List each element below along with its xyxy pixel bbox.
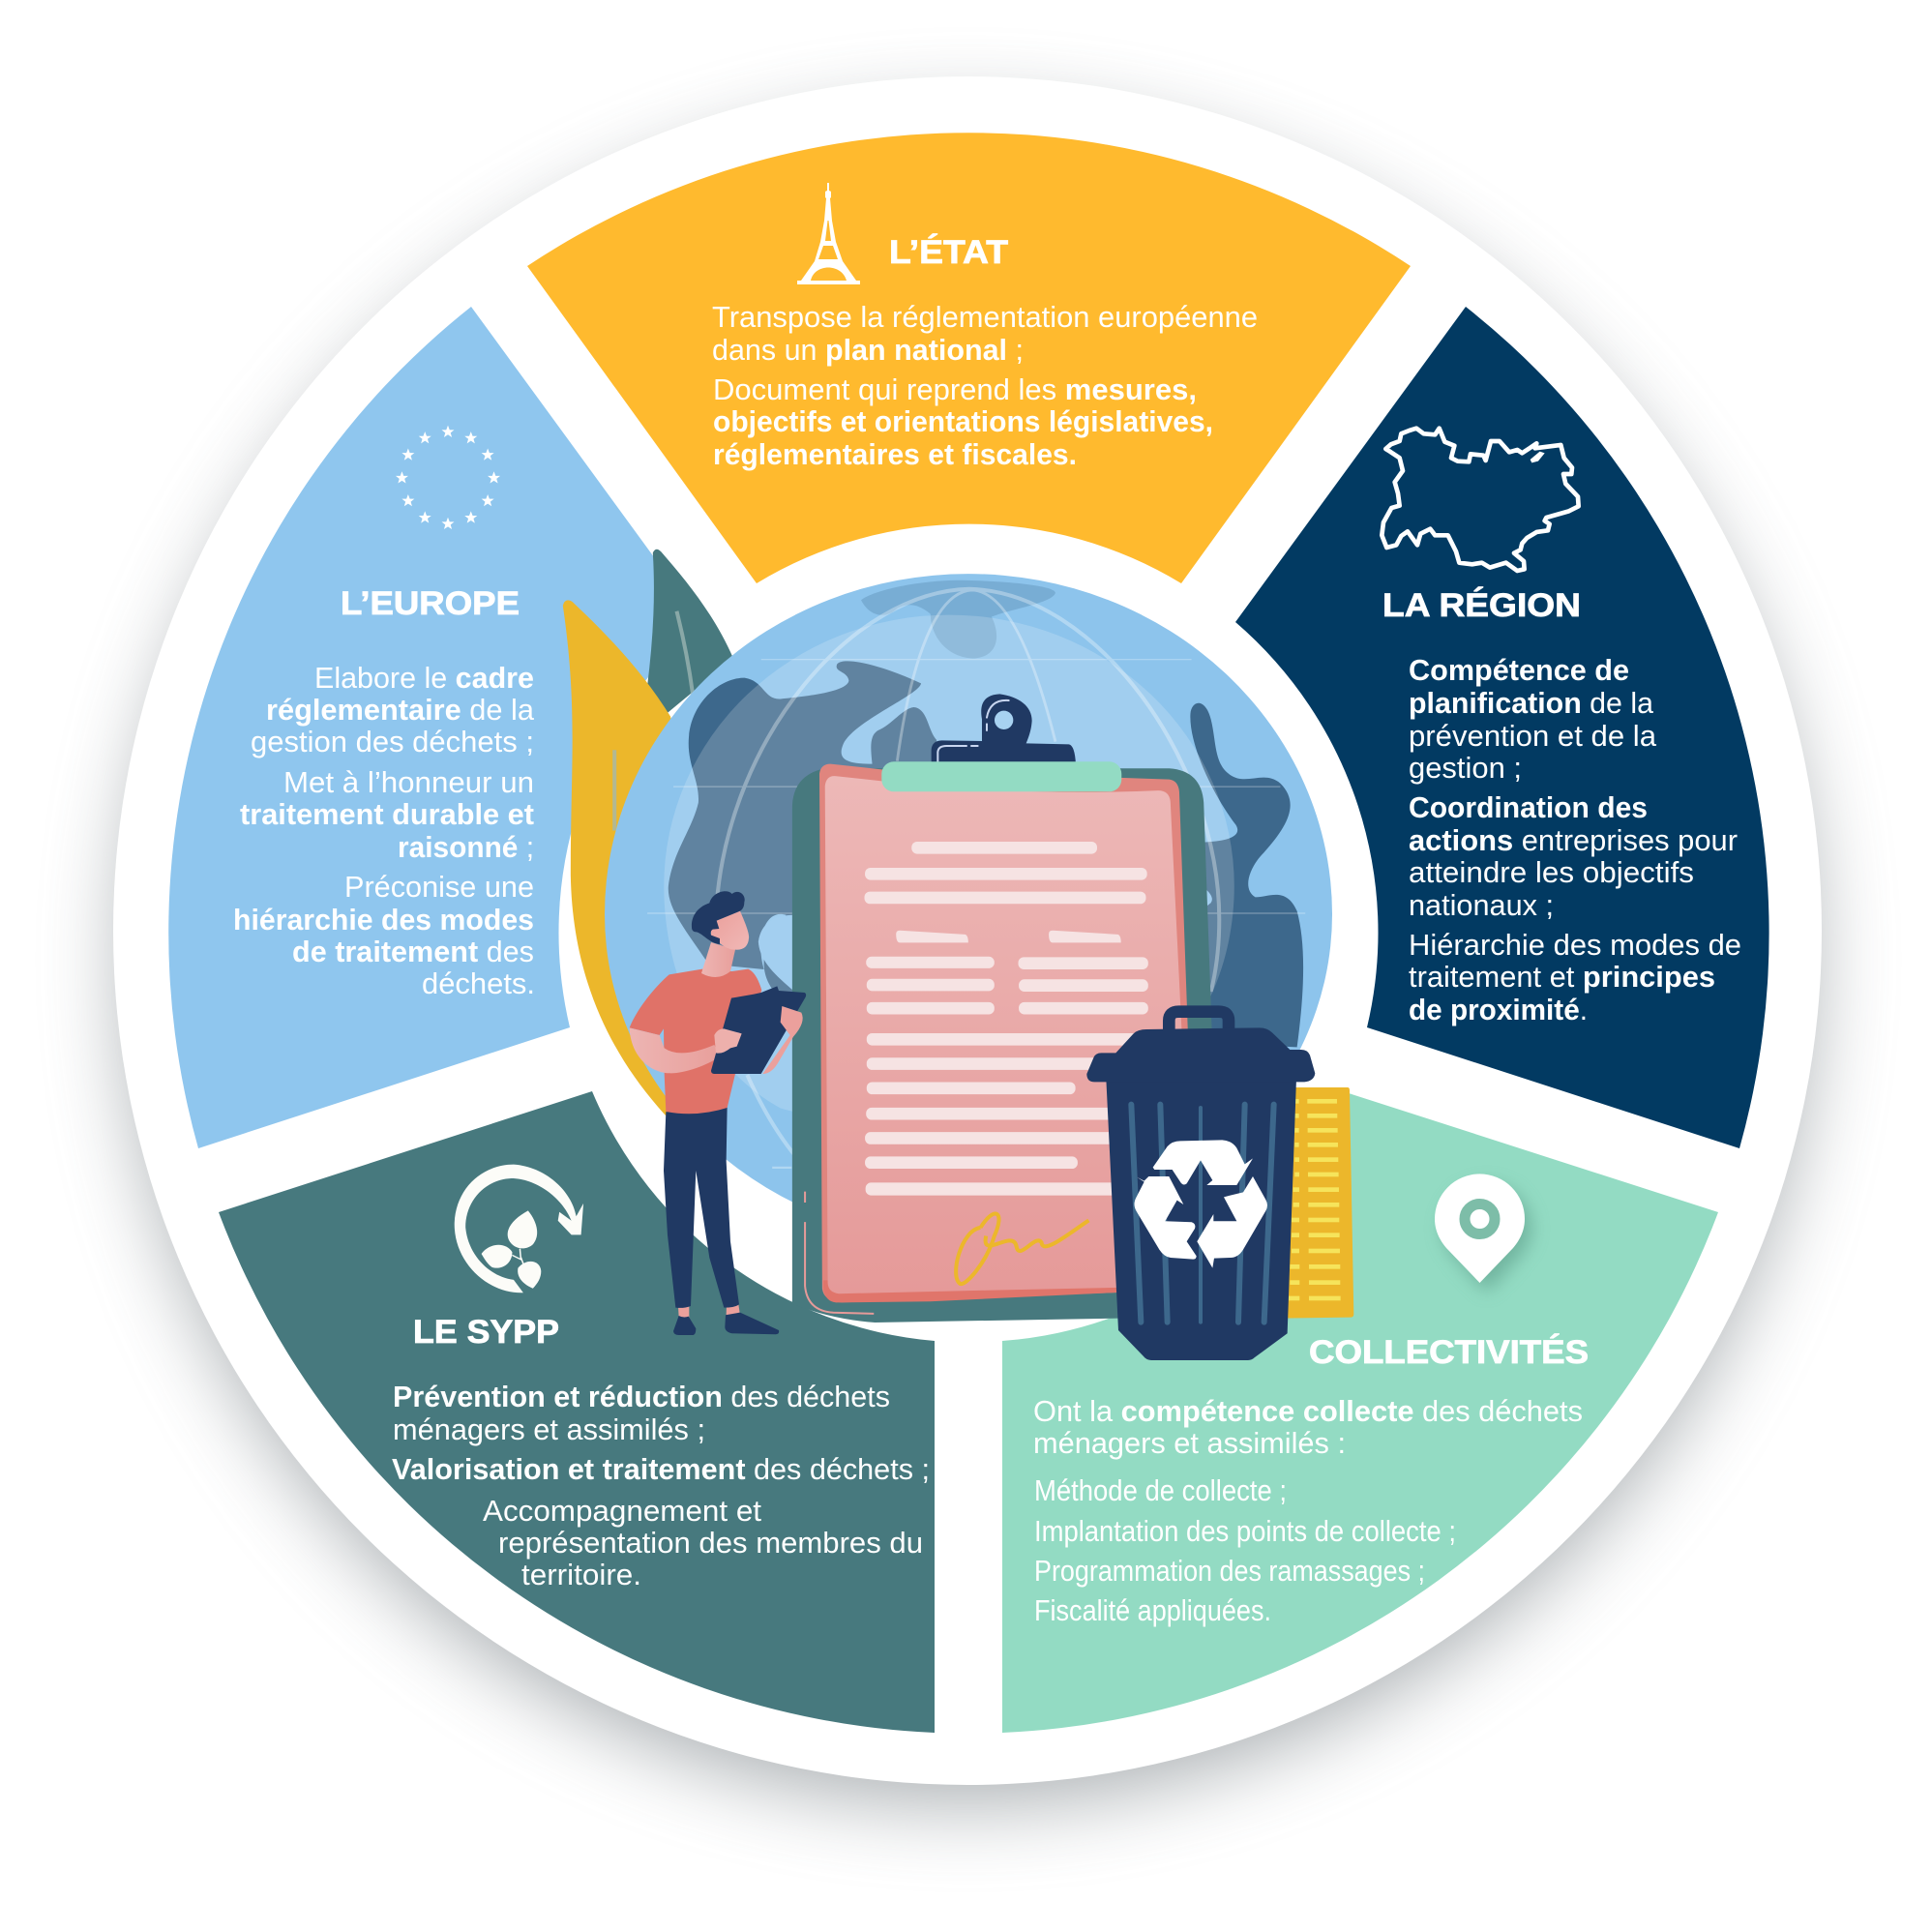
body text: Implantation des points de collecte ; — [1034, 1514, 1456, 1548]
panel text: l'État — [712, 183, 1258, 471]
small lake right — [1206, 890, 1212, 906]
body text: Méthode de collecte ; — [1034, 1473, 1287, 1507]
shoes — [673, 1313, 779, 1335]
body text: prévention et de la — [1409, 719, 1657, 753]
neck — [701, 942, 735, 977]
head — [711, 911, 749, 950]
body text: réglementaires et fiscales. — [713, 437, 1077, 471]
body text: Fiscalité appliquées. — [1034, 1593, 1271, 1627]
panel: la Région sector — [1235, 307, 1769, 1148]
body text: Document qui reprend les mesures, — [713, 372, 1197, 406]
heading: L’EUROPE — [341, 585, 520, 622]
body text: nationaux ; — [1409, 888, 1554, 922]
recycling bin — [1086, 1012, 1315, 1360]
body text: Valorisation et traitement des déchets ; — [392, 1452, 930, 1486]
body text: Met à l’honneur un — [283, 765, 534, 799]
panel: l'État sector — [527, 133, 1411, 583]
heading: L’ÉTAT — [889, 234, 1008, 271]
meridians and parallels — [647, 589, 1305, 1168]
trousers — [664, 1107, 739, 1308]
icon: recycling arrow with leaves — [455, 1165, 583, 1293]
right arm — [762, 1006, 803, 1074]
panel text: le SYPP — [392, 1165, 930, 1591]
body text: planification de la — [1409, 686, 1654, 720]
yellow leaf — [563, 600, 686, 1125]
body text: Compétence de — [1409, 653, 1629, 687]
body text: Accompagnement et — [483, 1494, 761, 1528]
signature — [956, 1214, 1088, 1284]
body text: traitement durable et — [240, 797, 534, 831]
central illustration: leaves — [563, 550, 733, 1125]
body text: objectifs et orientations législatives, — [713, 404, 1213, 438]
body text: déchets. — [422, 966, 535, 1000]
body text: gestion ; — [1409, 751, 1522, 785]
body text — [1033, 1394, 1583, 1627]
panel: le SYPP sector — [219, 1091, 935, 1733]
body text: Ont la compétence collecte des déchets — [1033, 1394, 1583, 1428]
body text — [392, 1380, 930, 1591]
body text: traitement et principes — [1409, 960, 1715, 994]
heading: COLLECTIVITÉS — [1309, 1334, 1589, 1371]
body text: gestion des déchets ; — [251, 725, 534, 758]
hand — [714, 1028, 742, 1054]
bin ribs — [1131, 1105, 1274, 1323]
yellow document behind the bin — [1280, 1087, 1353, 1319]
body text: actions entreprises pour — [1409, 823, 1738, 857]
body text: représentation des membres du — [498, 1526, 923, 1560]
clip — [932, 694, 1076, 764]
sheet bottom edge — [823, 1280, 1197, 1302]
teal leaf — [647, 550, 733, 725]
hand clipboard — [711, 986, 806, 1074]
body text: atteindre les objectifs — [1409, 855, 1694, 889]
body text: raisonné ; — [398, 830, 534, 864]
panel: collectivités sector — [1002, 1093, 1718, 1733]
body text — [233, 661, 535, 1000]
ankles — [678, 1304, 740, 1318]
body text: Hiérarchie des modes de — [1409, 928, 1741, 962]
lake — [758, 915, 794, 992]
right continent — [1180, 703, 1303, 1047]
icon: region outline — [1382, 429, 1579, 571]
light hemisphere — [664, 615, 1234, 1120]
panel text: collectivités — [1033, 1174, 1589, 1627]
body text: Préconise une — [344, 870, 534, 904]
shirt — [630, 969, 761, 1114]
body text: ménagers et assimilés ; — [393, 1412, 705, 1446]
drop shadow of the wheel — [125, 116, 1812, 1803]
body text: de proximité. — [1409, 993, 1588, 1026]
body text: réglementaire de la — [266, 693, 535, 727]
panel: l'Europe sector — [168, 307, 701, 1148]
body text: de traitement des — [292, 935, 534, 968]
mint clip bar — [881, 761, 1121, 791]
outer white disc — [113, 76, 1822, 1785]
sheet border — [819, 764, 1197, 1302]
icon: European stars — [396, 426, 500, 529]
hair — [692, 891, 745, 944]
clipboard document — [792, 694, 1222, 1323]
body text: territoire. — [521, 1558, 641, 1591]
body text: ménagers et assimilés : — [1033, 1426, 1346, 1460]
left arm — [630, 1027, 721, 1073]
heading: LE SYPP — [413, 1314, 559, 1351]
body text: hiérarchie des modes — [233, 903, 534, 936]
sheet text lines — [864, 842, 1155, 1196]
thin pink outline — [805, 1192, 874, 1314]
body text — [712, 300, 1258, 471]
body text: Prévention et réduction des déchets — [393, 1380, 890, 1413]
icon: location pin — [1435, 1174, 1531, 1293]
polar cap — [861, 580, 1055, 659]
panel text: l'Europe — [233, 426, 535, 1000]
body text — [1409, 653, 1741, 1026]
body text: Elabore le cadre — [314, 661, 534, 695]
body text: Coordination des — [1409, 790, 1648, 824]
man holding a clipboard — [630, 891, 806, 1335]
icon: Eiffel tower — [797, 183, 860, 284]
body text: Transpose la réglementation européenne — [712, 300, 1258, 334]
body text: Programmation des ramassages ; — [1034, 1554, 1425, 1588]
bin handle — [1169, 1012, 1229, 1032]
clipboard back — [792, 768, 1222, 1323]
heading: LA RÉGION — [1382, 587, 1581, 624]
left continent — [669, 661, 936, 1020]
panel text: la Région — [1382, 429, 1741, 1026]
globe disc — [605, 574, 1332, 1243]
globe — [605, 574, 1332, 1243]
bin body — [1106, 1079, 1296, 1360]
leaf veins — [614, 611, 693, 830]
recycling symbol — [1134, 1140, 1267, 1268]
sheet face — [825, 776, 1194, 1293]
bin lid — [1086, 1027, 1315, 1082]
body text: dans un plan national ; — [712, 333, 1024, 367]
